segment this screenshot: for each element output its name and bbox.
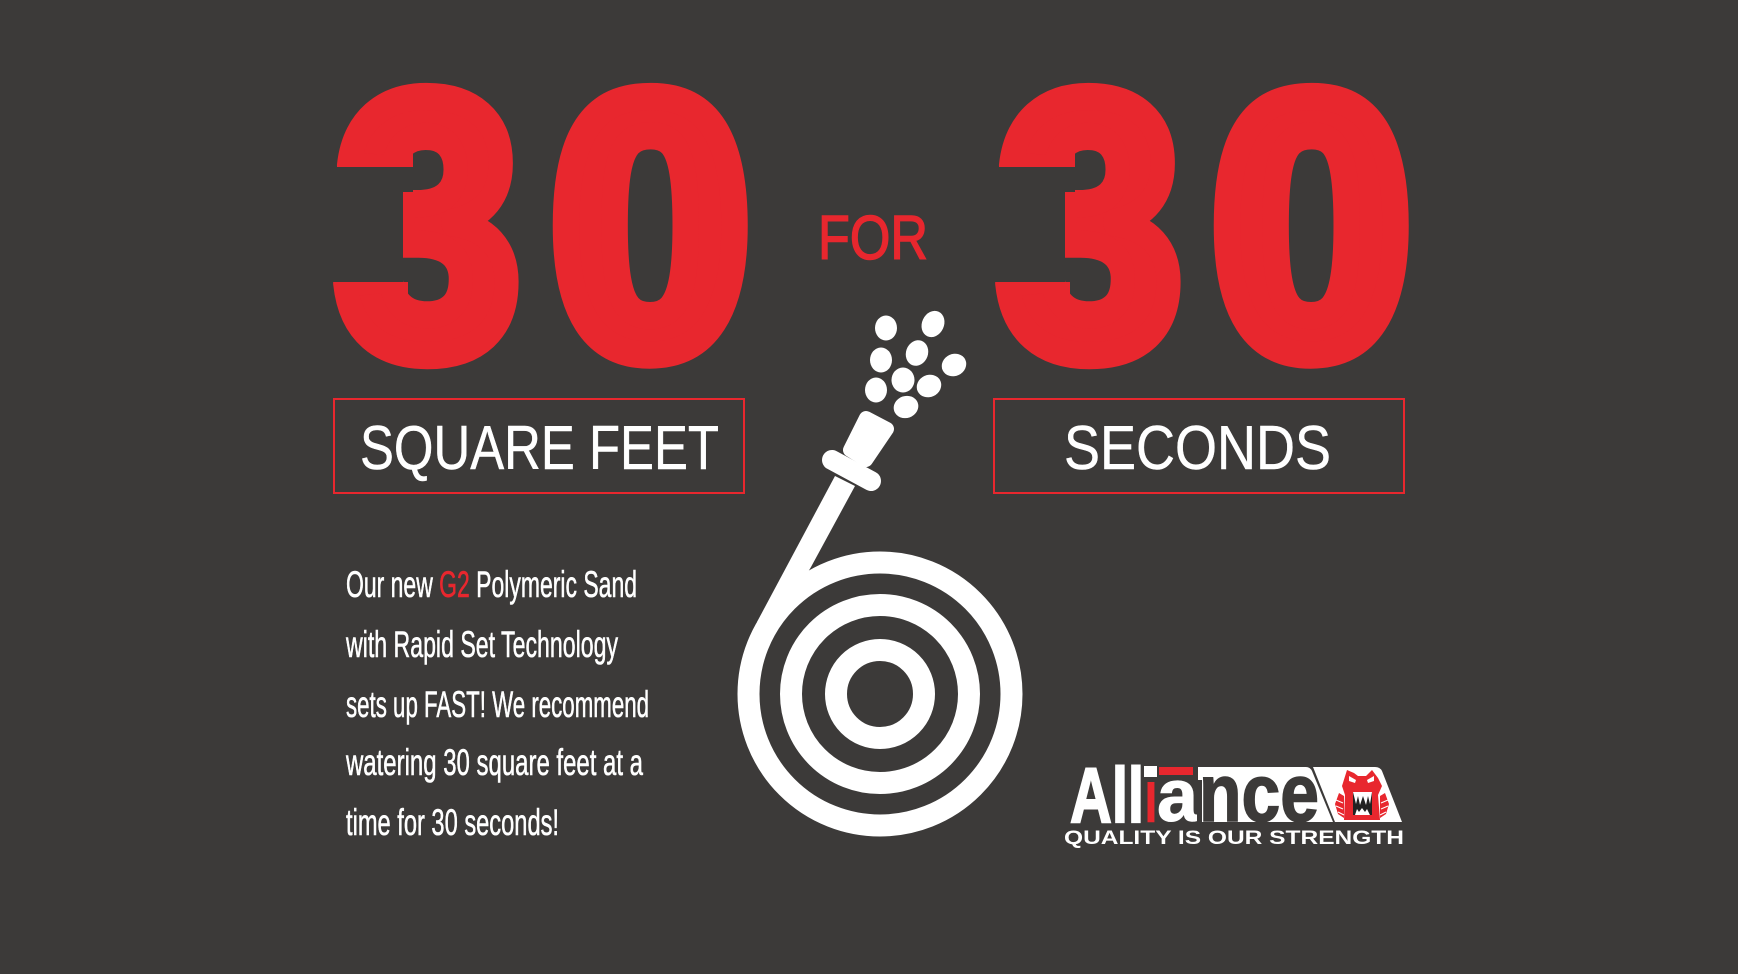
logo: Alliance bbox=[1064, 748, 1404, 849]
logo wordmark: a bbox=[1157, 754, 1199, 837]
nozzle handle bbox=[850, 418, 887, 460]
text block: description: time for 30 seconds! bbox=[346, 801, 559, 843]
hose coil rings bbox=[748, 562, 1012, 826]
logo wordmark bbox=[1070, 748, 1319, 839]
logo mascot: crocodile head bbox=[1335, 770, 1389, 820]
logo mascot panel bbox=[1313, 767, 1402, 822]
big number: 30 seconds: 3 bbox=[1000, 22, 1180, 430]
logo tagline: QUALITY IS OUR STRENGTH bbox=[1064, 827, 1404, 849]
logo wordmark: nce bbox=[1199, 748, 1319, 839]
text block: description bbox=[345, 563, 649, 843]
logo white band bbox=[1198, 767, 1333, 822]
big number: 30 seconds: 0 bbox=[1213, 22, 1410, 430]
text block: description: watering 30 square feet at a bbox=[345, 741, 643, 783]
big number: 30 seconds bbox=[987, 22, 1410, 430]
big number: 30 square feet: 3 bbox=[338, 22, 518, 430]
logo wordmark: All bbox=[1070, 751, 1144, 839]
label box: seconds: SECONDS bbox=[1064, 413, 1331, 483]
label box: seconds bbox=[994, 399, 1404, 493]
text block: description: Our new G2 Polymeric Sand bbox=[346, 563, 637, 605]
logo wordmark: i bbox=[1144, 754, 1158, 839]
big number: 30 square feet: 0 bbox=[552, 22, 749, 430]
big number: 30 square feet bbox=[325, 22, 749, 430]
label box: square feet: SQUARE FEET bbox=[360, 413, 719, 483]
water droplets bbox=[865, 307, 970, 422]
heading: for: FOR bbox=[818, 203, 928, 273]
icon: coiled water hose with spray bbox=[748, 307, 1012, 825]
text block: description: with Rapid Set Technology bbox=[345, 623, 618, 665]
nozzle collar bbox=[832, 460, 871, 481]
text block: description: sets up FAST! We recommend bbox=[346, 683, 649, 725]
label box: square feet bbox=[334, 399, 744, 493]
hose straight section bbox=[757, 476, 855, 628]
